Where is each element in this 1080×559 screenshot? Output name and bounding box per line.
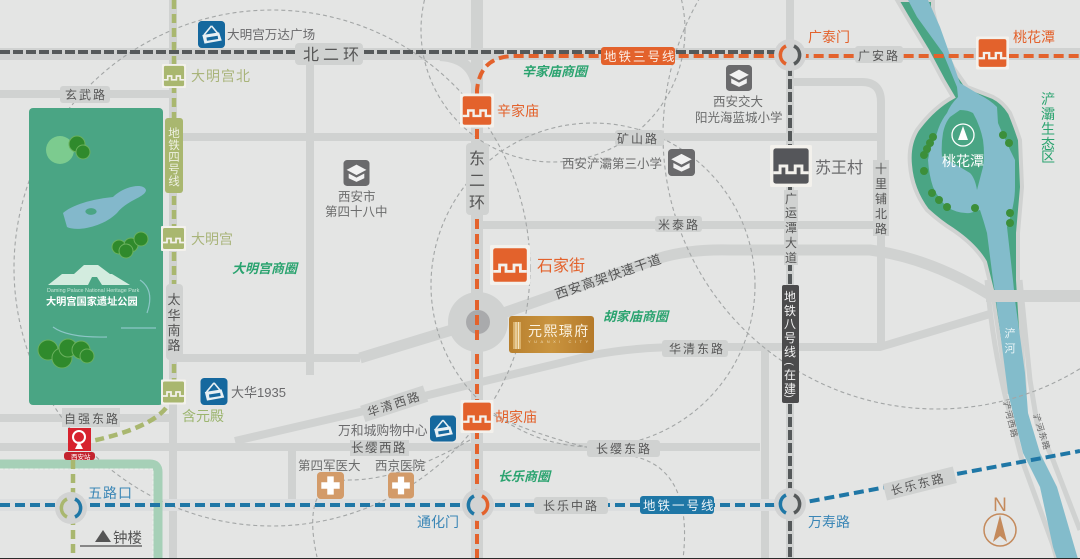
label: Guangyuntan avenue: 潭 xyxy=(785,221,797,235)
station: Shijiajie xyxy=(490,245,585,285)
POI: Chanba No. 3 primary school xyxy=(562,149,695,176)
transfer: Wulukou xyxy=(55,492,87,524)
label: Taihua south road: 太 xyxy=(167,292,181,307)
POI: Fourth Military Medical University xyxy=(298,459,361,499)
label: Guang'an road: 广安路 xyxy=(858,48,900,63)
business circle labels xyxy=(232,64,670,484)
POI: Xijing hospital xyxy=(375,459,426,498)
label: Shilipu north road: 路 xyxy=(875,221,887,236)
label: metro line 8: 号 xyxy=(784,331,796,345)
label: Chan river: 浐 xyxy=(1004,327,1016,340)
label: Huaqing east road xyxy=(662,340,728,357)
project marker: Yuanxi Jingfu: YUANXI CITY xyxy=(528,339,592,344)
label: Guangyuntan avenue xyxy=(784,190,798,265)
label: Chanba eco zone: 区 xyxy=(1041,149,1055,165)
lake: green banks xyxy=(897,0,1025,392)
station names: transfer stops xyxy=(88,29,850,530)
label: Shilipu north road: 铺 xyxy=(875,192,887,206)
POI: Wanda plaza: 大明宫万达广场 xyxy=(227,28,315,42)
label: Changying east road: 长缨东路 xyxy=(596,441,652,456)
label: metro line 3: 地铁三号线 xyxy=(604,50,677,64)
label: Xuanwu road: 玄武路 xyxy=(65,87,107,102)
station: Suwangcun: 苏王村 xyxy=(815,159,863,177)
label: Shilipu north road: 里 xyxy=(875,177,887,191)
business circle labels: 长乐商圈 xyxy=(498,469,552,484)
label: Taihua south road: 华 xyxy=(167,308,181,323)
label: Taohuatan park xyxy=(942,124,984,169)
park: chinese name: 大明宫国家遗址公园 xyxy=(46,295,138,308)
lake: central island xyxy=(942,110,984,190)
label: metro line 4: 地 xyxy=(168,127,180,140)
POI: Xijing hospital: 西京医院 xyxy=(375,459,426,473)
POI: school No. 48: 西安市 xyxy=(338,189,376,204)
lake: water xyxy=(908,0,1078,559)
label: Shilipu north road xyxy=(873,160,889,236)
project marker: Yuanxi Jingfu: 元熙璟府 xyxy=(528,323,590,339)
label: Kuangshan road: 矿山路 xyxy=(617,131,659,146)
label: Guangyuntan avenue: 广 xyxy=(785,192,797,206)
business circle labels: 大明宫商圈 xyxy=(232,261,299,276)
transfer: Wanshoulu xyxy=(774,488,806,520)
label: Taihua south road: 南 xyxy=(167,323,181,338)
icon: compass xyxy=(984,495,1016,546)
label: Xuanwu road xyxy=(60,86,110,103)
label: metro line 4: 四 xyxy=(168,152,180,164)
POI: Jiaoda Yangguang primary school: 阳光海蓝城小学 xyxy=(695,110,783,125)
label: metro line 4: 号 xyxy=(168,163,180,176)
label: Taohuatan park: 桃花潭 xyxy=(942,153,984,169)
POI: Dahua 1935 xyxy=(200,378,286,405)
POI: Jiaoda Yangguang primary school: 西安交大 xyxy=(713,94,763,109)
label: Taihua south road xyxy=(166,284,183,360)
station: Suwangcun xyxy=(770,145,863,187)
roundabout xyxy=(448,292,508,352)
label: metro line 8 xyxy=(782,285,799,403)
label: Dongerhuan xyxy=(466,143,489,215)
label: metro line 8: 建 xyxy=(784,382,796,396)
station names: transfer stops: 万寿路 xyxy=(808,514,850,530)
label: Changle east road: 长乐东路 xyxy=(889,470,947,498)
label: Beierhuan road xyxy=(295,43,363,65)
label: metro line 8: 线 xyxy=(784,345,796,359)
transfer: Guangtaimen xyxy=(774,39,806,71)
label: metro line 8: ( xyxy=(783,362,794,366)
north 2nd ring line xyxy=(0,50,790,54)
label: Ziqiang east road: 自强东路 xyxy=(64,411,120,426)
station names: transfer stops: 广泰门 xyxy=(808,29,850,45)
station: Daminggong North: 大明宫北 xyxy=(191,68,251,84)
label: metro line 8: 铁 xyxy=(784,304,796,318)
label: Shilipu north road: 十 xyxy=(875,162,887,176)
label: Chan river xyxy=(1004,327,1016,355)
POI: Fourth Military Medical University: 第四军医大 xyxy=(298,459,361,473)
label: Mitai road: 米泰路 xyxy=(658,217,700,232)
park: tree clusters xyxy=(38,136,148,368)
river and Taohuatan lake xyxy=(897,0,1080,559)
business circle labels: 胡家庙商圈 xyxy=(603,309,670,324)
icon: Xi'an railway station xyxy=(64,428,95,461)
label: metro line 1: 地铁一号线 xyxy=(643,499,716,513)
label: Xi'an elevated expressway: 西安高架快速干道 xyxy=(553,251,664,302)
label: Huaqing west road: 华清西路 xyxy=(365,388,423,420)
river: embankment roads xyxy=(987,280,1080,559)
label: Chanhe east road: 浐河东路 xyxy=(1031,413,1052,452)
metro line 8 xyxy=(788,66,792,559)
label: Shilipu north road: 北 xyxy=(875,207,887,221)
POI: Chanba No. 3 primary school: 西安浐灞第三小学 xyxy=(562,156,662,171)
station: Hanyuandian: 含元殿 xyxy=(182,408,224,424)
label: Chanba eco zone: 态 xyxy=(1041,136,1055,152)
bottom edge line xyxy=(0,558,1080,559)
metro line 1 xyxy=(0,451,1080,505)
business circle labels: 辛家庙商圈 xyxy=(522,64,589,79)
POI: Jiaoda Yangguang primary school xyxy=(695,65,783,125)
label: metro line 4: 线 xyxy=(168,174,180,188)
station: Taohuatan: 桃花潭 xyxy=(1013,29,1055,45)
label: Guangyuntan avenue: 运 xyxy=(785,206,797,220)
label: Chanba eco zone: 灞 xyxy=(1041,106,1055,122)
park: english name: Daming Palace National Heritage Park xyxy=(47,288,140,294)
transfer: Tonghuamen xyxy=(462,489,494,521)
label: Dongerhuan: 东 xyxy=(469,150,485,168)
POI: school No. 48 xyxy=(325,160,388,219)
label: Changle middle road: 长乐中路 xyxy=(543,498,599,513)
label: Changle east road xyxy=(883,467,957,500)
icon: Xi'an railway station: 西安站 xyxy=(71,452,91,461)
label: Beierhuan road: 北二环 xyxy=(303,46,363,64)
landmark: Bell Tower: 钟楼 xyxy=(113,530,142,547)
label: Huaqing east road: 华清东路 xyxy=(669,341,725,356)
label: Chanba eco zone xyxy=(1041,91,1055,165)
label: metro line 8: ) xyxy=(783,394,794,398)
station: Daminggong: 大明宫 xyxy=(191,231,233,247)
park: lake xyxy=(63,186,146,229)
label: Dongerhuan: 二 xyxy=(469,173,485,190)
station names: transfer stops: 通化门 xyxy=(417,514,459,530)
POI: Wanhe mall: 万和城购物中心 xyxy=(338,423,428,438)
panel: Daming Palace park xyxy=(29,108,163,405)
label: Chanba eco zone: 生 xyxy=(1041,121,1055,137)
station: Hujiamiao xyxy=(460,400,537,433)
station: Daminggong xyxy=(161,226,233,251)
metro line 4 xyxy=(73,0,174,559)
POI: Dahua 1935: 大华1935 xyxy=(231,385,286,400)
label: Guangyuntan avenue: 道 xyxy=(785,251,797,265)
label: Guangyuntan avenue: 大 xyxy=(785,236,797,250)
lake: tree clusters xyxy=(920,131,1014,227)
project marker: Yuanxi Jingfu xyxy=(509,316,594,353)
label: Changying west road: 长缨西路 xyxy=(351,440,407,455)
station: Xinjiamiao xyxy=(460,94,539,128)
label: Changying east road xyxy=(587,440,660,457)
label: metro line 4 xyxy=(165,118,183,193)
POI: school No. 48: 第四十八中 xyxy=(325,204,388,219)
station names: transfer stops: 五路口 xyxy=(88,485,133,501)
label: Changle middle road xyxy=(534,497,608,514)
station: Xinjiamiao: 辛家庙 xyxy=(497,103,539,119)
station: Daminggong North xyxy=(162,64,251,88)
label: metro line 8: 在 xyxy=(784,368,796,382)
POI: Wanhe mall xyxy=(338,416,456,442)
park: water lines xyxy=(53,280,156,337)
station: Shijiajie: 石家街 xyxy=(537,257,585,275)
landmark: Bell Tower xyxy=(80,530,142,547)
station: Taohuatan xyxy=(976,29,1055,70)
park: palace roof illustration xyxy=(48,265,130,285)
icon: compass: N xyxy=(993,495,1007,516)
green frame: old city wall xyxy=(0,464,158,559)
label: Taihua south road: 路 xyxy=(167,338,181,353)
label: Chanba eco zone: 浐 xyxy=(1041,91,1055,107)
metro line 3 xyxy=(477,56,1080,559)
label: Chanhe west road: 浐河西路 xyxy=(1001,400,1020,439)
label: Chan river: 河 xyxy=(1004,342,1016,355)
park: light tree canopy xyxy=(46,136,74,164)
label: metro line 8: 地 xyxy=(784,290,796,304)
station: Hanyuandian xyxy=(161,380,224,424)
station: Hujiamiao: 胡家庙 xyxy=(495,409,537,425)
road over river xyxy=(986,290,1080,302)
label: metro line 8: 八 xyxy=(784,317,796,331)
label: metro line 4: 铁 xyxy=(168,139,180,152)
label: Dongerhuan: 环 xyxy=(469,195,485,212)
POI: Wanda plaza xyxy=(198,21,315,48)
